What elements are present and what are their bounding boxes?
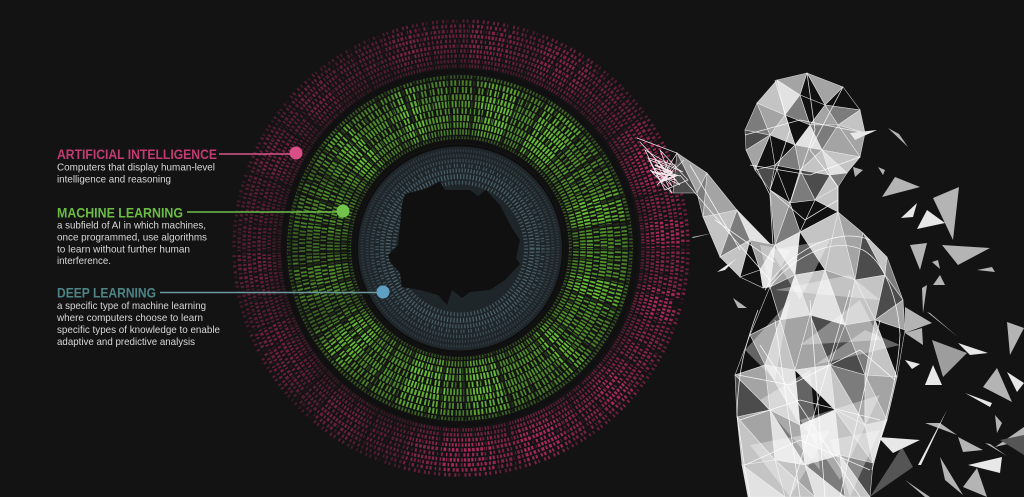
figure: pointing arm	[673, 153, 775, 288]
heading: machine learning: MACHINE LEARNING	[57, 204, 183, 220]
ring: artificial intelligence (outer, pink)	[234, 21, 688, 475]
label block: deep learning	[56, 284, 390, 348]
label block: artificial intelligence	[57, 146, 302, 186]
text: DL description: specific types of knowledge to enable	[57, 324, 220, 336]
text: AI description: intelligence and reasoning	[57, 174, 171, 186]
leader line and dot: ML	[187, 204, 350, 218]
ring: machine learning (middle, green)	[289, 77, 631, 419]
pupil: dark irregular centre	[388, 181, 520, 305]
leader line and dot: DL	[160, 286, 390, 298]
text: DL description: where computers choose to learn	[56, 312, 203, 324]
text: ML description	[57, 220, 207, 267]
figure: hand wireframe scribble	[637, 138, 688, 193]
text: ML description: a subfield of AI in which machines,	[57, 220, 206, 232]
text: ML description: to learn without further human	[57, 244, 190, 256]
text: DL description: adaptive and predictive analysis	[57, 336, 195, 348]
ring: deep learning (inner, slate blue)	[357, 146, 563, 352]
text: DL description	[56, 300, 220, 348]
heading: artificial intelligence: ARTIFICIAL INTELLIGENCE	[57, 146, 217, 162]
figure: head	[745, 73, 865, 203]
leader line and dot: AI	[219, 146, 302, 160]
text: AI description: Computers that display human-level	[57, 162, 215, 174]
low-poly human figure	[673, 73, 905, 497]
shading patches across the rings	[210, 0, 712, 497]
ring separators	[284, 72, 636, 424]
text: AI description	[57, 162, 215, 186]
figure: white wireframe contours	[680, 73, 900, 497]
scattered triangle fragments	[692, 128, 1024, 497]
text: DL description: a specific type of machine learning	[57, 300, 206, 312]
figure: neck	[770, 187, 838, 245]
label block: machine learning	[57, 204, 350, 267]
text: ML description: interference.	[57, 255, 111, 267]
heading: deep learning: DEEP LEARNING	[57, 284, 156, 300]
text: ML description: once programmed, use algorithms	[57, 232, 207, 244]
concentric data rings	[210, 0, 712, 497]
figure: torso	[735, 212, 905, 497]
figure: bright overlapping shards	[745, 240, 900, 497]
